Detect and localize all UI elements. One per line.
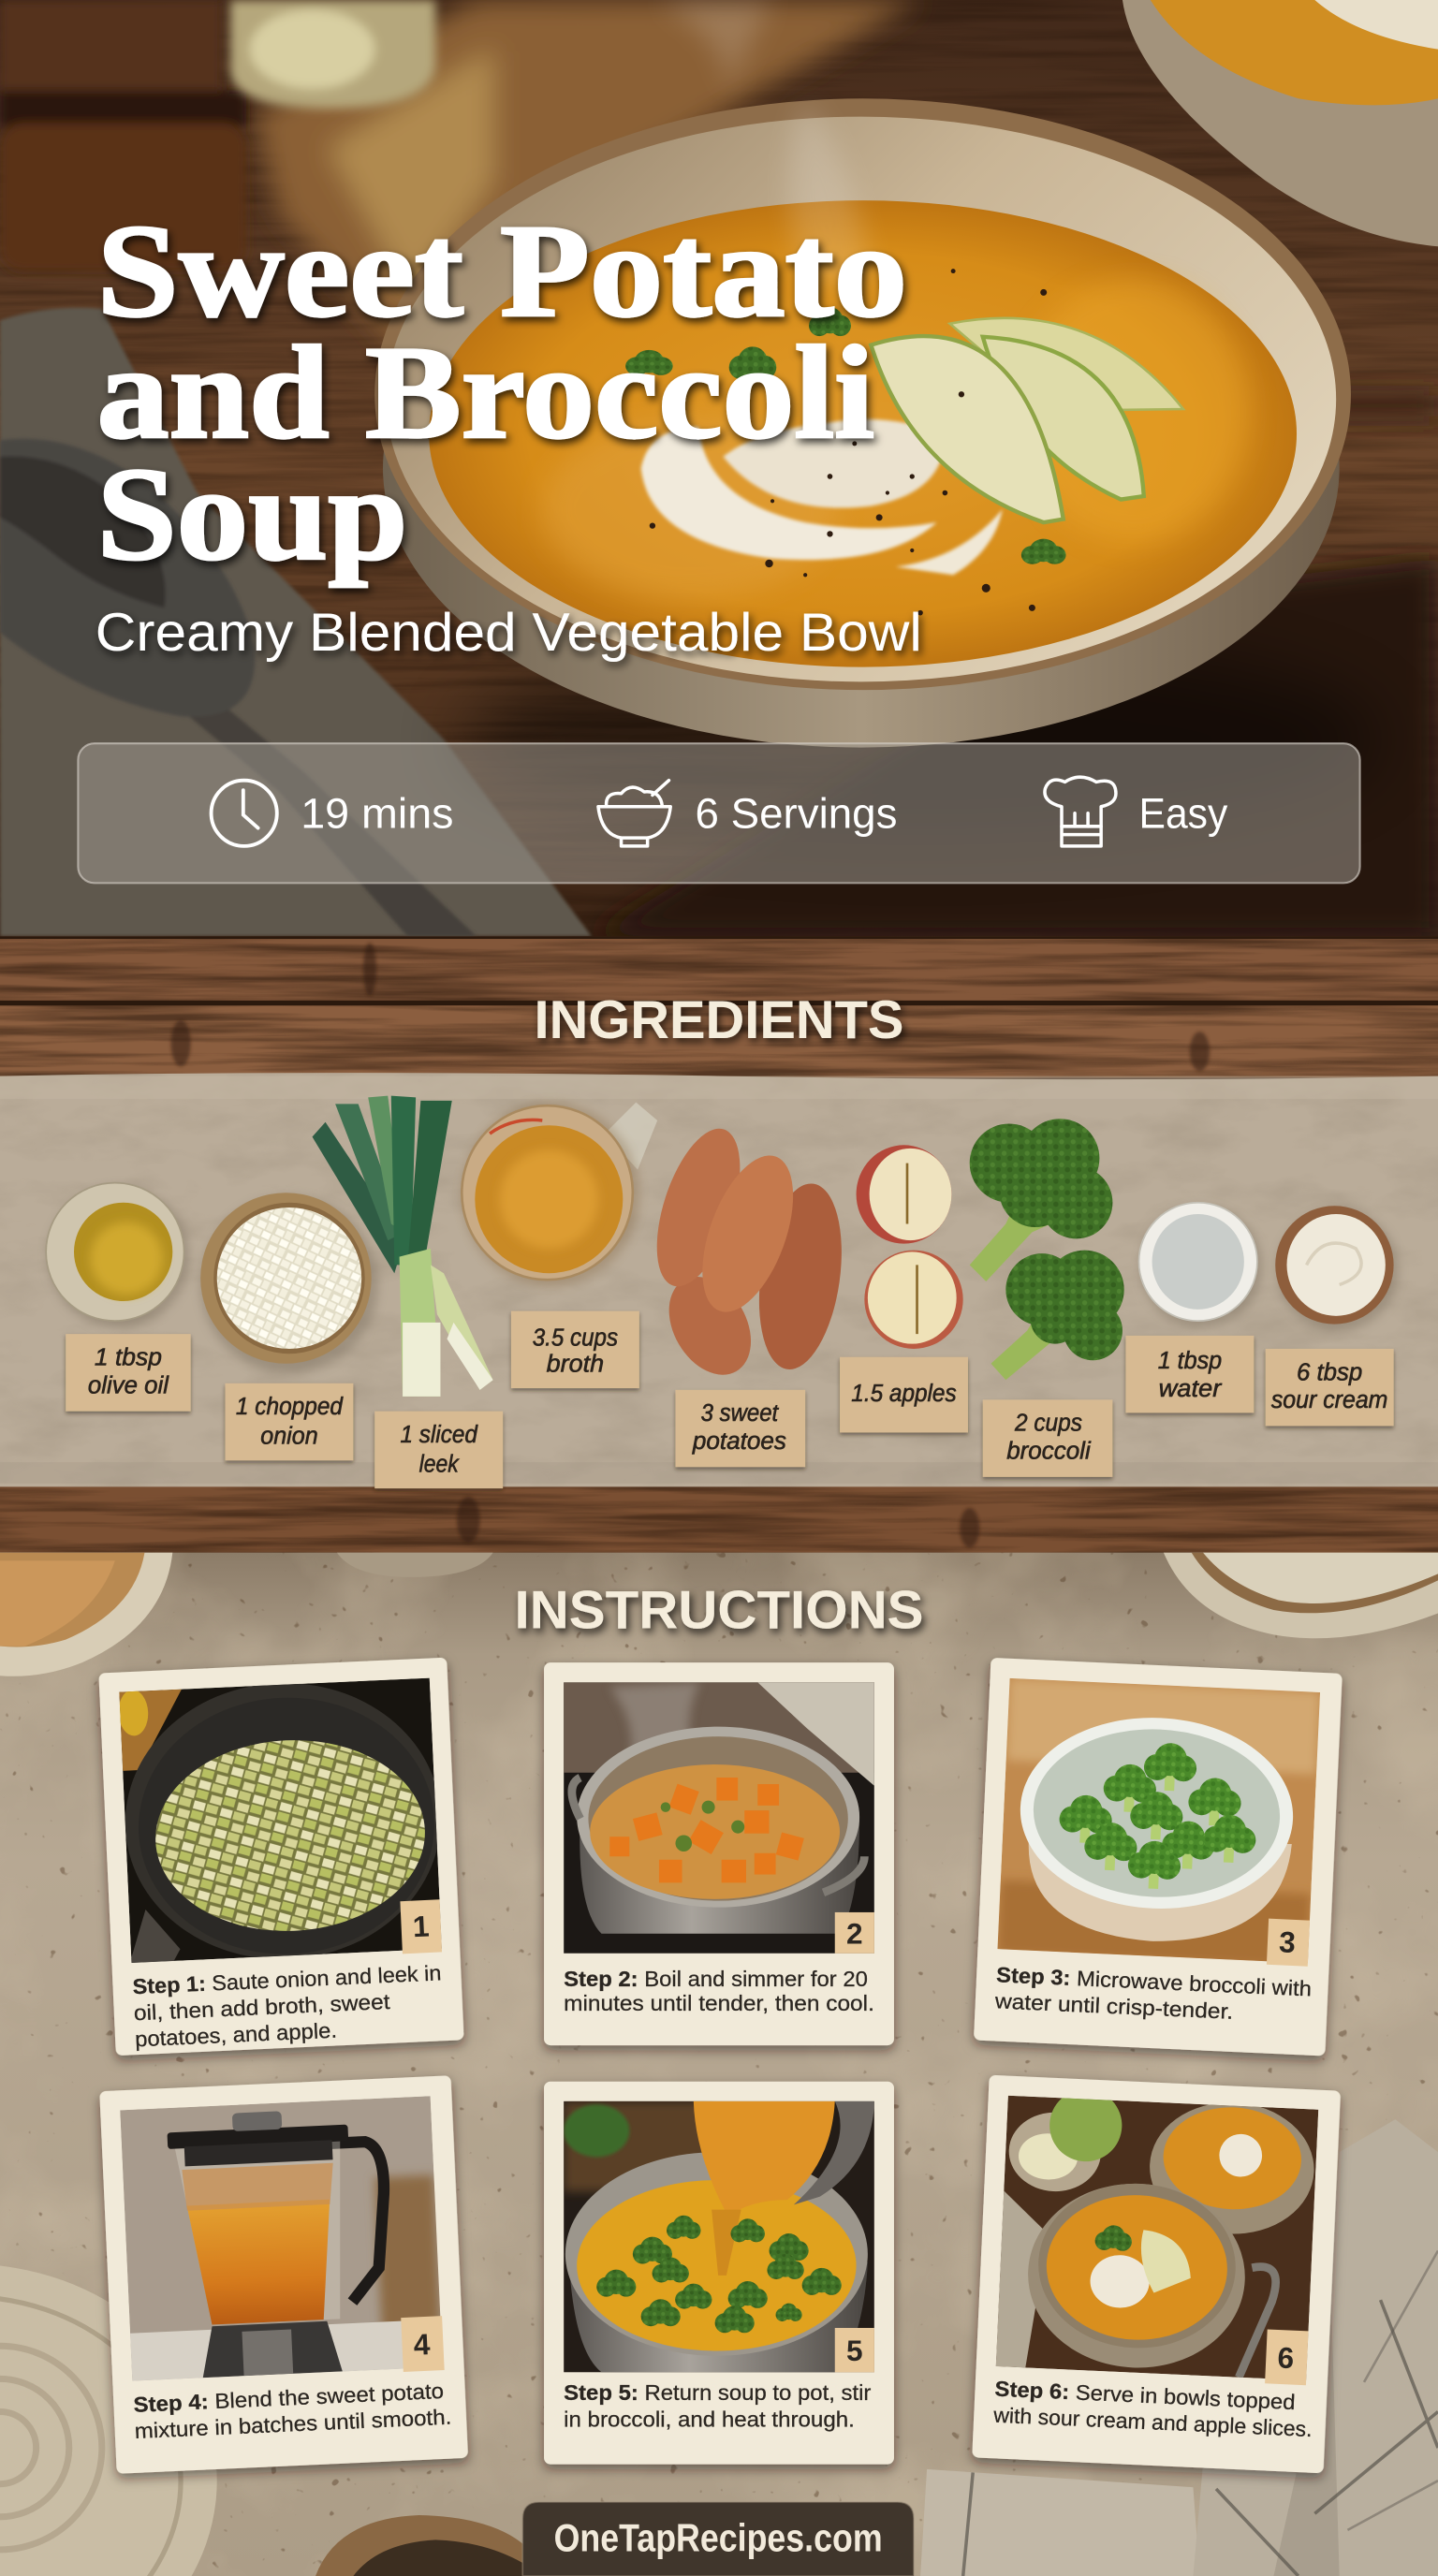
glass jar (230, 0, 435, 109)
step number 5 (835, 2328, 874, 2372)
label: water (1125, 1336, 1254, 1412)
caption 2: minutes until tender, then cool. (564, 1991, 874, 2015)
apple slices (871, 318, 1183, 522)
caption 5 (564, 2380, 872, 2431)
caption 1: oil, then add broth, sweet (133, 1989, 391, 2025)
measuring cup with broth (462, 1103, 657, 1286)
panel: ingredients (0, 936, 1438, 1553)
label: sour cream: 6 tbsp (1297, 1357, 1362, 1385)
step number 6 (1265, 2329, 1309, 2385)
stat: difficulty: Easy (1139, 790, 1227, 838)
decor: bottom small bowl (315, 2515, 526, 2576)
step number 1: 1 (412, 1909, 430, 1943)
title (97, 197, 907, 588)
decor: top centre bowl (337, 1553, 493, 1577)
step number 3: 3 (1278, 1925, 1297, 1959)
photo: soup poured into pot (564, 2101, 874, 2372)
bowl rim (374, 98, 1351, 690)
stats bar (78, 743, 1360, 883)
wooden board background (255, 0, 1438, 936)
photo: saute pan (116, 1676, 448, 1984)
subtitle: Creamy Blended Vegetable Bowl (95, 603, 922, 663)
card: step 6 (972, 2075, 1341, 2473)
soup surface (429, 200, 1297, 667)
step number 1 (400, 1899, 442, 1954)
label: onion: 1 chopped (236, 1392, 344, 1420)
broccoli (970, 1119, 1124, 1380)
footer badge (522, 2502, 914, 2576)
panel: instructions (0, 1553, 1438, 2576)
label: sweet potatoes (675, 1390, 805, 1467)
olive oil bowl (46, 1183, 189, 1327)
label: water: water (1159, 1374, 1223, 1402)
caption 6 (992, 2377, 1313, 2441)
sour cream bowl (1275, 1206, 1399, 1331)
card: step 4 (99, 2075, 468, 2474)
caption 3: water until crisp-tender. (993, 1988, 1234, 2024)
icon: clock (212, 781, 277, 846)
label: broth: 3.5 cups (533, 1323, 618, 1351)
water bowl (1139, 1203, 1262, 1327)
footer badge: OneTapRecipes.com (554, 2516, 883, 2560)
caption 1: Step 1: Saute onion and leek in (132, 1960, 442, 1998)
black pepper (650, 269, 1047, 615)
icon: bowl of rice (598, 781, 670, 846)
photo: blender (120, 2096, 443, 2386)
card: step 5 (544, 2082, 894, 2465)
caption 2: Step 2: Boil and simmer for 20 (564, 1967, 868, 1991)
stat: servings: 6 Servings (696, 790, 897, 838)
caption 1: potatoes, and apple. (135, 2018, 337, 2051)
card: step 3 (974, 1658, 1343, 2056)
second soup bowl (1123, 0, 1438, 246)
caption 4: Step 4: Blend the sweet potato (133, 2378, 445, 2417)
caption 1 (132, 1960, 444, 2051)
steam (657, 0, 871, 279)
card: step 2 (544, 1662, 894, 2045)
sweet potatoes (640, 1119, 853, 1389)
caption 4 (133, 2378, 452, 2443)
caption 5: Step 5: Return soup to pot, stir (564, 2380, 872, 2405)
caption 3: Step 3: Microwave broccoli with (996, 1962, 1313, 2001)
photo: served soup (996, 2086, 1319, 2380)
photo: broccoli in bowl (997, 1678, 1320, 1968)
onion bowl (200, 1193, 378, 1373)
stone background (0, 1553, 1438, 2576)
label: broccoli (983, 1399, 1112, 1477)
label: broccoli: 2 cups (1014, 1409, 1082, 1437)
label: leek (374, 1412, 503, 1488)
linen runner (0, 1073, 1438, 1486)
label: leek: 1 sliced (400, 1420, 478, 1448)
label: broccoli: broccoli (1006, 1437, 1092, 1465)
label: water: 1 tbsp (1158, 1346, 1222, 1374)
caption 2 (564, 1967, 874, 2015)
leek (313, 1096, 493, 1397)
heading: instructions: INSTRUCTIONS (514, 1580, 924, 1640)
decor: bottom left plate (0, 2264, 217, 2576)
label: sour cream (1266, 1349, 1394, 1426)
photo: pot of soup (564, 1682, 874, 1954)
spoon (0, 439, 477, 936)
caption 4: mixture in batches until smooth. (134, 2405, 452, 2443)
hero panel (0, 0, 1438, 936)
label: apples: 1.5 apples (851, 1379, 957, 1407)
label: broth: broth (547, 1350, 604, 1378)
decor: top left bowl (0, 1553, 172, 1676)
caption 3 (993, 1962, 1313, 2027)
step number 6: 6 (1277, 2340, 1295, 2375)
card: step 1 (98, 1658, 464, 2056)
bowl body (383, 451, 1340, 748)
label: sour cream: sour cream (1271, 1385, 1387, 1413)
label: olive oil: olive oil (88, 1370, 169, 1398)
label: apples (840, 1357, 968, 1432)
cream swirl (641, 419, 1003, 575)
heading: ingredients: INGREDIENTS (535, 990, 903, 1050)
stat: time: 19 mins (301, 790, 453, 838)
label: sweet potatoes: 3 sweet (701, 1398, 780, 1427)
wood planks (0, 936, 1438, 1553)
label: olive oil (66, 1334, 191, 1412)
step number 2 (835, 1912, 874, 1954)
label: onion (225, 1383, 353, 1460)
pepper mill (0, 0, 246, 271)
label: sweet potatoes: potatoes (692, 1427, 786, 1455)
title: and Broccoli (97, 318, 874, 466)
icon: chef hat (1045, 777, 1116, 846)
label: broth (511, 1311, 639, 1388)
label: onion: onion (260, 1422, 318, 1450)
napkin (0, 308, 592, 936)
step number 2: 2 (846, 1916, 863, 1950)
caption 6: with sour cream and apple slices. (992, 2403, 1313, 2441)
step number 5: 5 (846, 2334, 863, 2367)
step number 4: 4 (413, 2327, 432, 2362)
label: leek: leek (419, 1450, 460, 1478)
main bowl (374, 0, 1381, 838)
caption 6: Step 6: Serve in bowls topped (994, 2377, 1296, 2414)
decor: towels (920, 2119, 1438, 2576)
title: Sweet Potato (97, 197, 907, 344)
broccoli garnish (625, 307, 1066, 564)
caption 5: in broccoli, and heat through. (564, 2407, 855, 2431)
label: olive oil: 1 tbsp (95, 1342, 162, 1370)
step number 4 (401, 2316, 445, 2372)
title: Soup (97, 440, 407, 588)
decor: top right bowl (1164, 1553, 1438, 1638)
apples (857, 1145, 963, 1349)
step number 3 (1267, 1919, 1310, 1967)
